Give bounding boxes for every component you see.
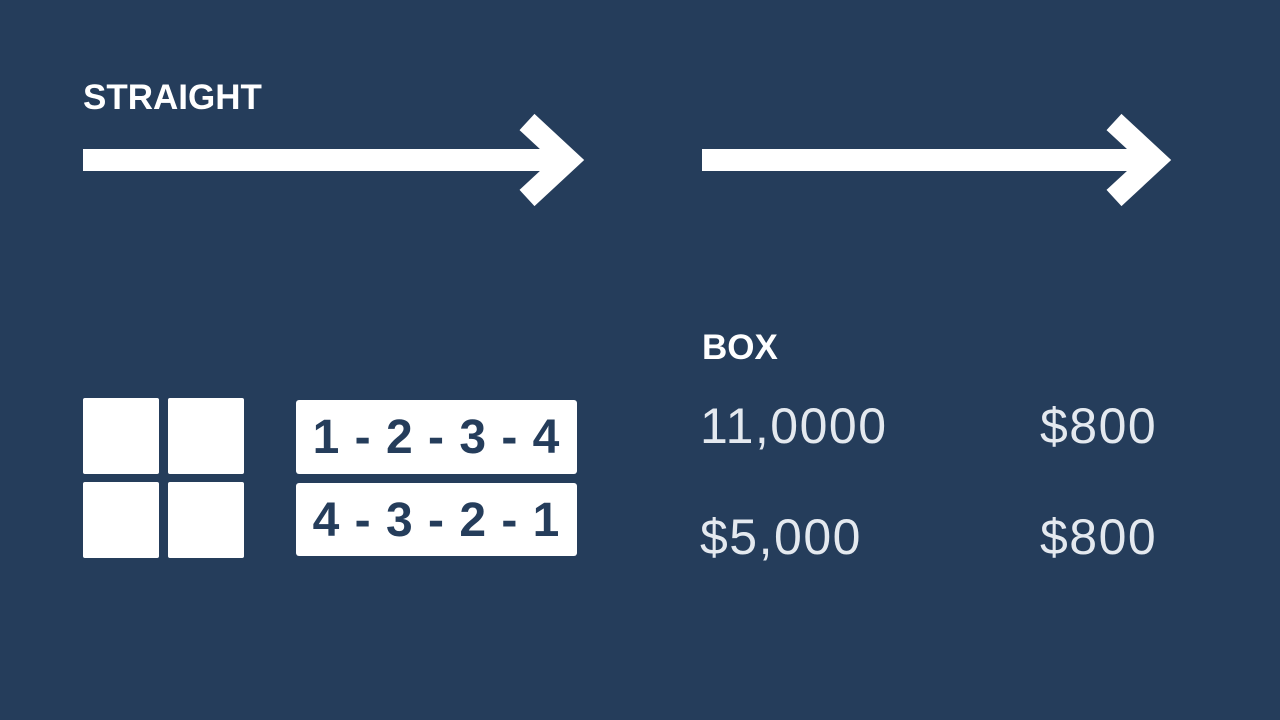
icon: four squares	[83, 398, 244, 558]
number values	[700, 398, 1157, 565]
heading: box: BOX	[702, 328, 778, 367]
sequence box 1: 1 - 2 - 3 - 4	[313, 411, 560, 464]
arrow: right	[702, 114, 1172, 206]
number values: $5,000	[700, 509, 862, 565]
number values: $800	[1040, 509, 1157, 565]
sequence box 2: 4 - 3 - 2 - 1	[313, 494, 560, 547]
sequence box 2	[296, 483, 577, 556]
arrow: left	[83, 114, 584, 206]
heading: straight: STRAIGHT	[83, 78, 262, 117]
number values: 11,0000	[700, 398, 888, 454]
number values: $800	[1040, 398, 1157, 454]
sequence box 1	[296, 400, 577, 474]
